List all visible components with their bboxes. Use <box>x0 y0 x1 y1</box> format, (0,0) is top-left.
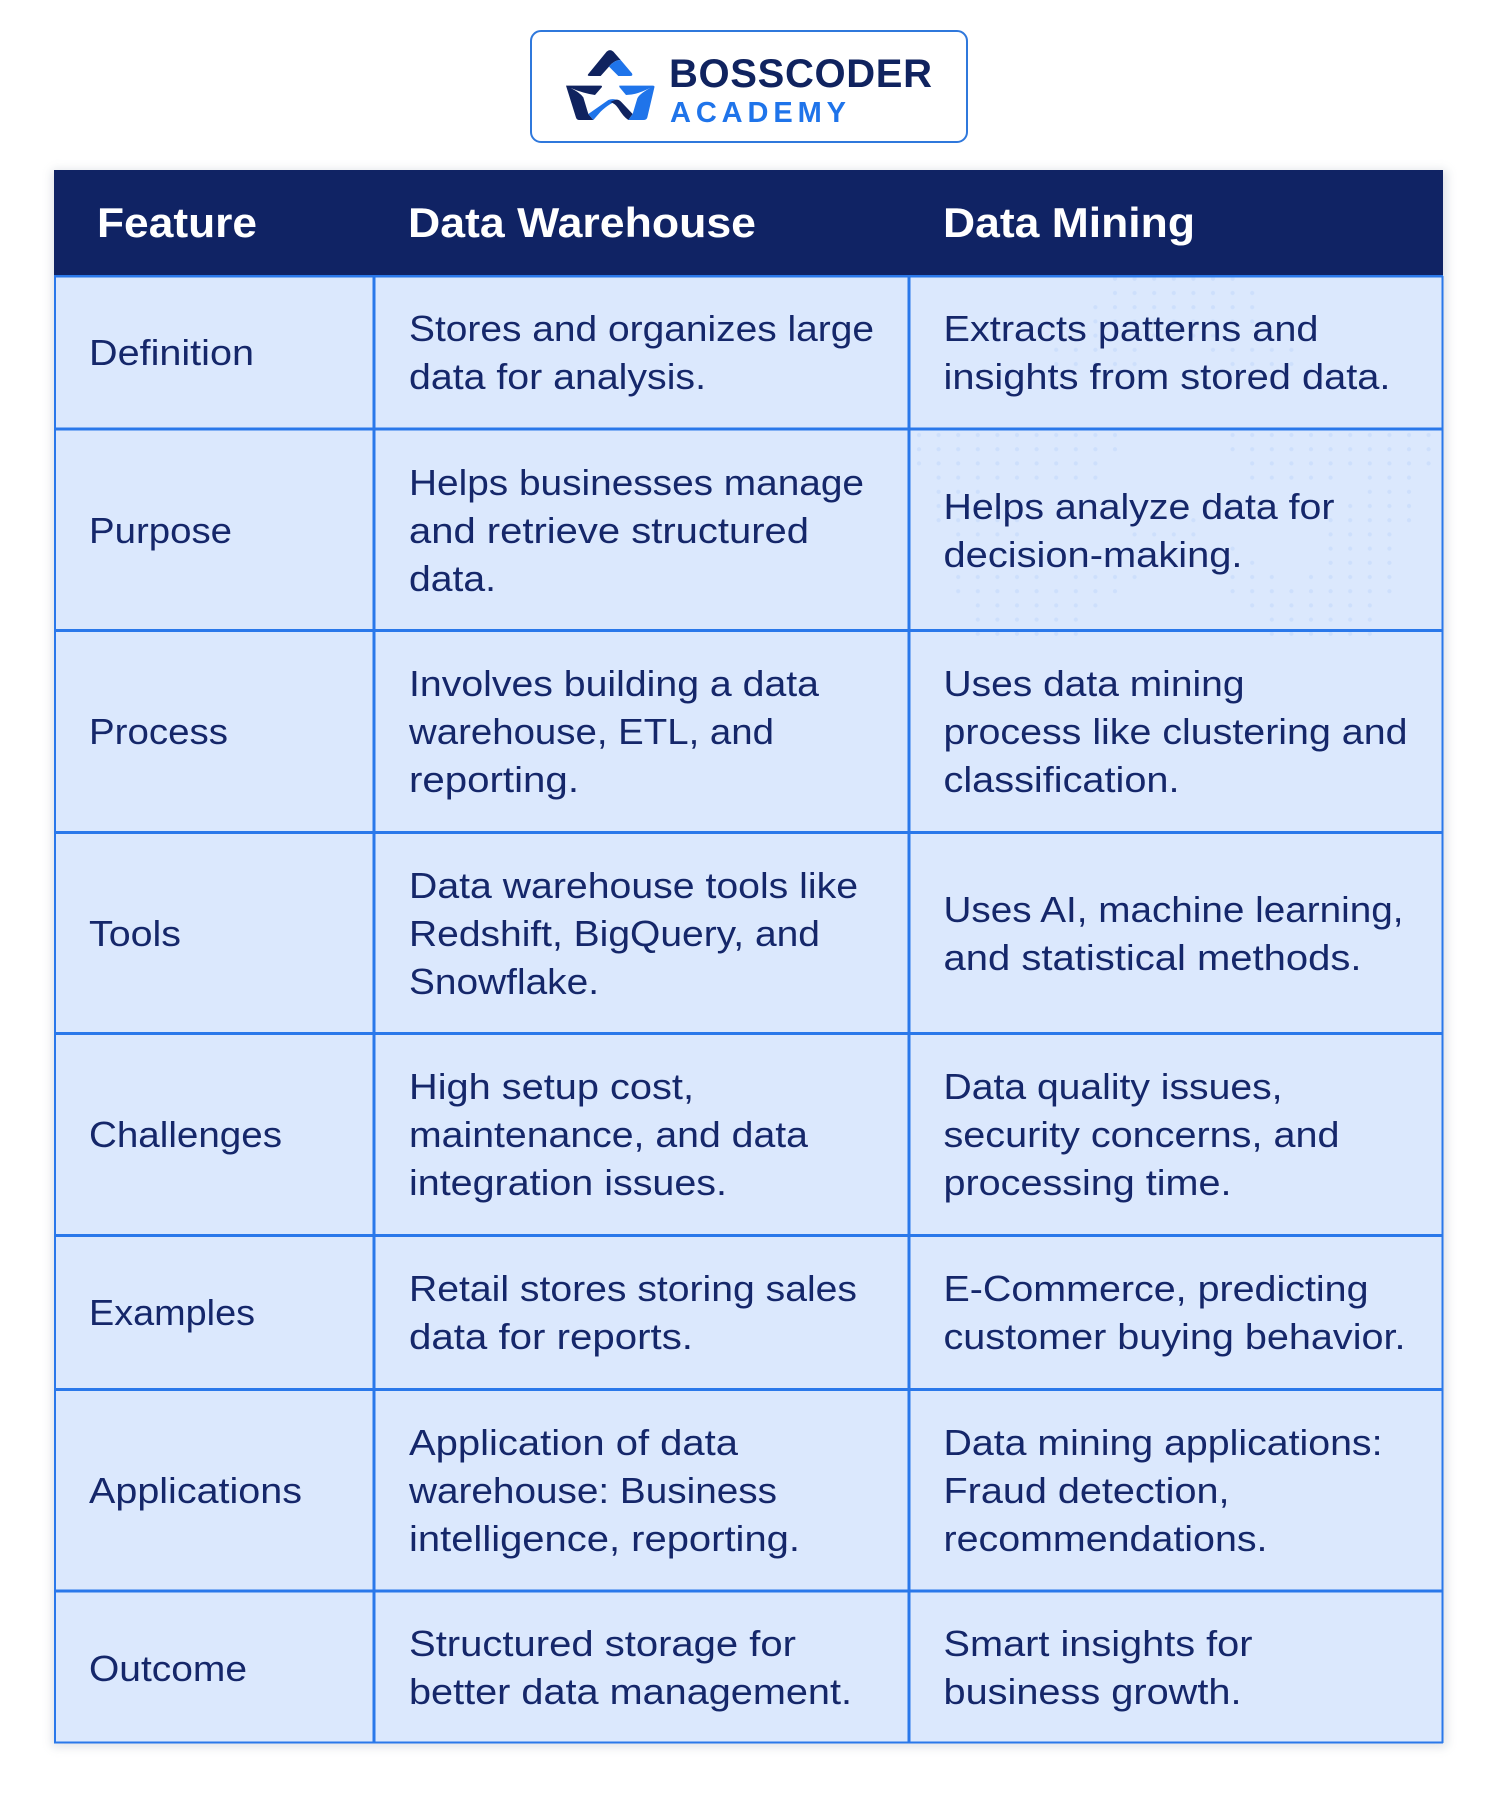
feature label: Definition <box>89 332 254 373</box>
data mining cell: business growth. <box>944 1671 1242 1712</box>
data warehouse cell: Data warehouse tools like <box>409 865 858 906</box>
feature label: Purpose <box>89 510 232 551</box>
data mining cell <box>944 486 1334 575</box>
dotted world map watermark <box>909 272 1438 641</box>
data mining cell: customer buying behavior. <box>944 1316 1406 1357</box>
row: Outcome <box>89 1623 1252 1712</box>
data mining cell: Extracts patterns and <box>944 308 1318 349</box>
row: Process <box>89 663 1408 800</box>
data warehouse cell: Structured storage for <box>409 1623 796 1664</box>
data mining cell: security concerns, and <box>944 1114 1340 1155</box>
data mining cell <box>944 1422 1382 1559</box>
feature label: Outcome <box>89 1648 247 1689</box>
row: Applications <box>89 1422 1382 1559</box>
data mining cell: Helps analyze data for <box>944 486 1334 527</box>
header: Data Warehouse: Data Warehouse <box>408 199 756 246</box>
data warehouse cell: Stores and organizes large <box>409 308 874 349</box>
data warehouse cell: Helps businesses manage <box>409 462 864 503</box>
data mining cell: Uses data mining <box>944 663 1244 704</box>
feature label: Examples <box>89 1292 255 1333</box>
logo wordmark: BOSSCODER <box>669 52 932 96</box>
data mining cell: Fraud detection, <box>944 1470 1230 1511</box>
row: Purpose <box>89 462 1334 599</box>
data warehouse cell <box>409 1066 809 1203</box>
data mining cell <box>944 889 1404 978</box>
feature label: Applications <box>89 1470 302 1511</box>
data warehouse cell <box>408 1422 800 1559</box>
data mining cell <box>944 308 1390 397</box>
data warehouse cell: Retail stores storing sales <box>409 1268 857 1309</box>
data warehouse cell: and retrieve structured <box>409 510 809 551</box>
icon: Bosscoder star mark <box>566 50 654 120</box>
row: Definition <box>89 308 1390 397</box>
feature label: Challenges <box>89 1114 282 1155</box>
data mining cell: recommendations. <box>944 1518 1268 1559</box>
data mining cell: E-Commerce, predicting <box>944 1268 1368 1309</box>
row: Tools <box>89 865 1404 1002</box>
data warehouse cell: intelligence, reporting. <box>409 1518 800 1559</box>
data mining cell <box>944 1268 1406 1357</box>
data mining cell: Uses AI, machine learning, <box>944 889 1404 930</box>
data warehouse cell: data. <box>409 558 496 599</box>
data warehouse cell: integration issues. <box>409 1162 727 1203</box>
data warehouse cell: maintenance, and data <box>409 1114 809 1155</box>
data warehouse cell: Involves building a data <box>409 663 820 704</box>
row: Examples <box>89 1268 1406 1357</box>
data warehouse cell: data for reports. <box>409 1316 693 1357</box>
data warehouse cell <box>409 1268 857 1357</box>
feature label: Process <box>89 711 228 752</box>
row: Challenges <box>89 1066 1340 1203</box>
data mining cell: classification. <box>944 759 1180 800</box>
data warehouse cell: Application of data <box>409 1422 739 1463</box>
data warehouse cell <box>409 308 874 397</box>
data mining cell: Data mining applications: <box>944 1422 1382 1463</box>
header: Data Mining: Data Mining <box>943 199 1195 246</box>
data mining cell: insights from stored data. <box>944 356 1390 397</box>
data warehouse cell <box>408 663 820 800</box>
data warehouse cell: Redshift, BigQuery, and <box>409 913 820 954</box>
data warehouse cell: High setup cost, <box>409 1066 694 1107</box>
data mining cell <box>944 1066 1340 1203</box>
data warehouse cell: data for analysis. <box>409 356 706 397</box>
data mining cell: decision-making. <box>944 534 1242 575</box>
data warehouse cell: warehouse, ETL, and <box>408 711 774 752</box>
data warehouse cell <box>409 1623 852 1712</box>
header: Feature: Feature <box>97 199 257 246</box>
logo subtitle: ACADEMY <box>670 97 846 129</box>
data mining cell: Data quality issues, <box>944 1066 1282 1107</box>
data mining cell: and statistical methods. <box>944 937 1362 978</box>
data warehouse cell <box>409 462 864 599</box>
data mining cell: Smart insights for <box>944 1623 1252 1664</box>
data warehouse cell: warehouse: Business <box>408 1470 777 1511</box>
data warehouse cell <box>409 865 858 1002</box>
data mining cell: processing time. <box>944 1162 1232 1203</box>
data mining cell <box>944 663 1408 800</box>
data mining cell: process like clustering and <box>944 711 1408 752</box>
feature label: Tools <box>89 913 181 954</box>
data warehouse cell: reporting. <box>409 759 579 800</box>
table grid lines <box>54 275 1444 1744</box>
logo: Bosscoder Academy <box>531 31 967 142</box>
data warehouse cell: Snowflake. <box>409 961 599 1002</box>
data mining cell <box>944 1623 1252 1712</box>
logo frame <box>531 31 967 142</box>
data warehouse cell: better data management. <box>409 1671 852 1712</box>
table header bar <box>54 170 1443 276</box>
